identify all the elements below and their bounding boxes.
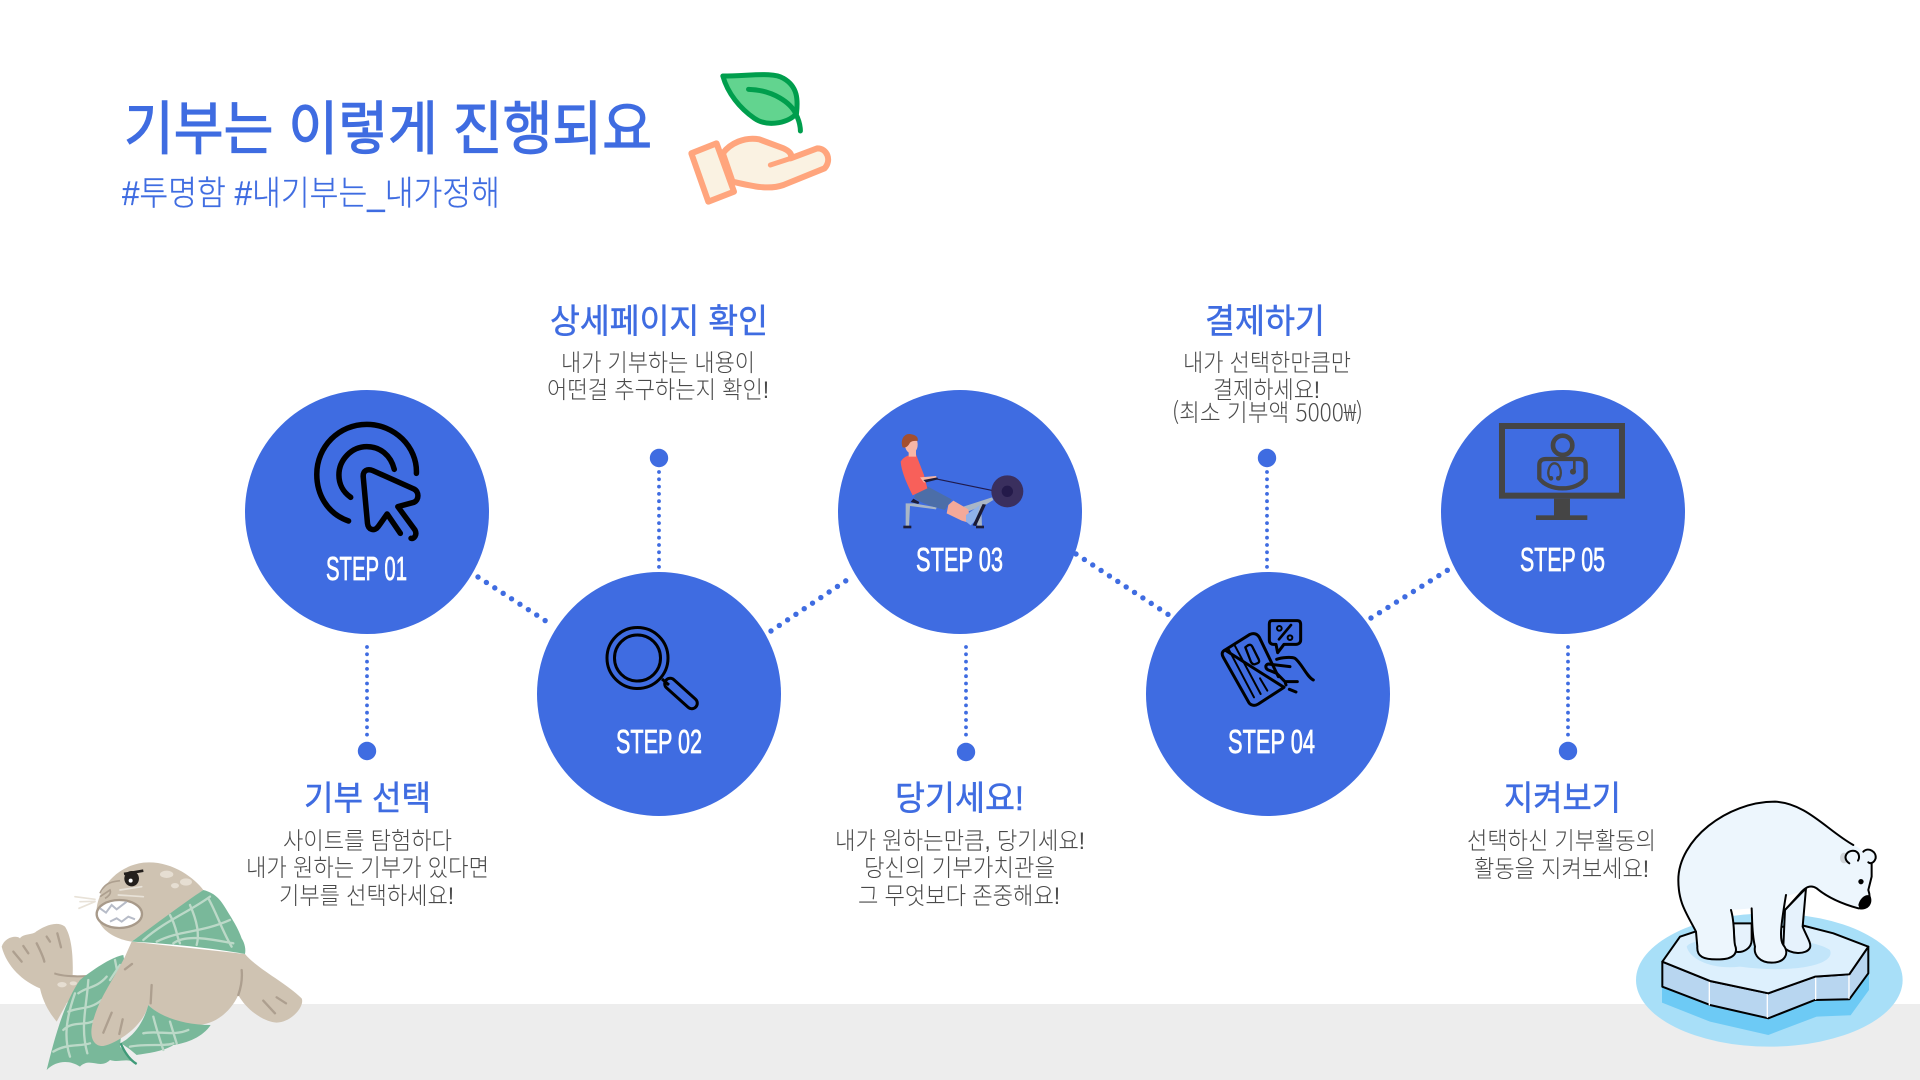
step 03 label: STEP 03 [916,541,1003,578]
text: step 1 description: 내가 원하는 기부가 있다면 [246,855,489,882]
dotted connectors between steps [478,554,1451,631]
text: step 5 description: 선택하신 기부활동의 [1467,828,1656,855]
step 04 label: STEP 04 [1228,723,1315,760]
step 04 circle [1146,572,1390,816]
icon: credit card in hand with percent bubble [1222,621,1313,705]
text: step 2 description: 상세페이지 확인 [550,303,768,341]
icon: monitor with doctor [1502,426,1622,520]
text: step 3 description: 그 무엇보다 존중해요! [858,883,1060,910]
text: step 3 description: 내가 원하는만큼, 당기세요! [835,828,1085,855]
illustration: seal tangled in fishing net [2,862,302,1070]
step 05 label: STEP 05 [1520,541,1605,578]
title: 기부는 이렇게 진행되요 [124,97,652,162]
icon: cursor click [317,424,418,538]
text: step 2 description: 어떤걸 추구하는지 확인! [547,377,769,404]
text: step 3 description: 당기세요! [895,780,1024,818]
text: step 3 description: 당신의 기부가치관을 [864,855,1055,882]
text: step 2 description: 내가 기부하는 내용이 [561,350,755,377]
text: step 1 description: 기부를 선택하세요! [279,883,454,910]
icon: magnifier [607,628,700,711]
illustration: polar bear on melting ice [1636,802,1903,1047]
text: step 1 description: 사이트를 탐험하다 [283,828,452,855]
text: step 2 description [547,303,769,404]
step 01 label: STEP 01 [326,550,407,587]
step 05 circle [1441,390,1685,634]
text: step 3 description [835,780,1085,910]
step 03 circle [838,390,1082,634]
text: step 5 description: 활동을 지켜보세요! [1474,856,1649,883]
step 02 label: STEP 02 [616,723,702,760]
text: step 1 description [246,780,489,910]
icon: hand holding leaf [691,75,828,202]
text: step 4 description: 결제하기 [1205,303,1325,341]
text: step 5 description: 지켜보기 [1504,780,1621,818]
text: step 4 description: 결제하세요! [1213,377,1320,404]
step 02 circle [537,572,781,816]
subtitle hashtags: #투명함 #내기부는_내가정해 [122,175,500,213]
text: step 1 description: 기부 선택 [304,780,431,818]
text: step 5 description [1467,780,1656,883]
text: step 4 description: 내가 선택한만큼만 [1183,350,1351,377]
text: step 4 description: (최소 기부액 5000₩) [1172,393,1363,428]
icon: rowing person [901,434,1023,528]
step 01 circle [245,390,489,634]
text: step 4 description [1172,303,1363,428]
bottom gray band [0,1004,1920,1080]
dotted stems and end dots [358,449,1577,761]
